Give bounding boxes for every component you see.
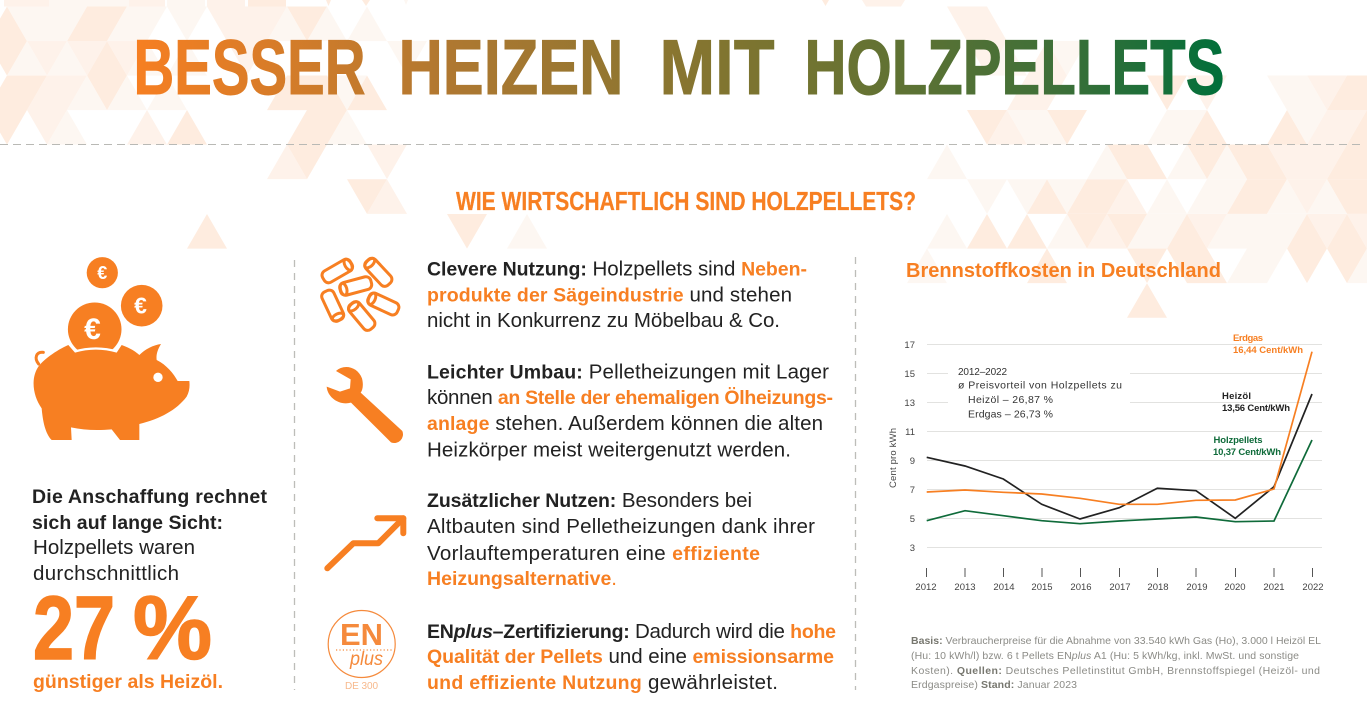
title: MIT bbox=[660, 23, 774, 111]
label: Heizöl: Heizöl bbox=[1222, 391, 1251, 402]
callout: average price advantage: ø Preisvorteil von Holzpellets zu bbox=[958, 380, 1122, 392]
panel: fuel costs bbox=[888, 260, 1324, 691]
y axis labels: 13 bbox=[904, 398, 915, 409]
source note: Kosten). Quellen: Deutsches Pelletinstitut GmbH, Brennstoffspiegel (Heizöl- und bbox=[911, 665, 1320, 677]
line: Heizöl bbox=[927, 394, 1312, 519]
text: additional benefit: Heizungsalternative. bbox=[427, 567, 617, 590]
label: Erdgas: 16,44 Cent/kWh bbox=[1233, 345, 1303, 356]
text: cheaper than oil: günstiger als Heizöl. bbox=[33, 671, 223, 693]
callout: average price advantage: Heizöl – 26,87 % bbox=[968, 394, 1053, 406]
line: Erdgas bbox=[927, 352, 1312, 504]
x axis labels: 2021 bbox=[1263, 582, 1285, 593]
icon: piggy bank with euro coins: € bbox=[134, 292, 147, 318]
y axis title: Cent pro kWh bbox=[888, 428, 899, 488]
title: BESSER bbox=[134, 23, 366, 111]
label: Holzpellets: Holzpellets bbox=[1214, 435, 1262, 446]
x axis labels: 2017 bbox=[1109, 582, 1131, 593]
source note bbox=[911, 635, 1321, 691]
x axis labels: 2019 bbox=[1186, 582, 1208, 593]
text: certification bbox=[427, 620, 836, 694]
text: easy conversion: Leichter Umbau: Pelletheizungen mit Lager bbox=[427, 360, 829, 384]
x axis labels: 2013 bbox=[954, 582, 976, 593]
y axis labels: 11 bbox=[905, 427, 915, 438]
source note: (Hu: 10 kWh/l) bzw. 6 t Pellets ENplus A1 (Hu: 5 kWh/kg, inkl. MwSt. und sonstige bbox=[911, 650, 1299, 662]
source note: Basis: Verbraucherpreise für die Abnahme von 33.540 kWh Gas (Ho), 3.000 l Heizöl EL bbox=[911, 635, 1321, 647]
background triangle pattern bbox=[0, 0, 1367, 318]
label: Heizöl bbox=[1222, 391, 1290, 414]
big number: 27 bbox=[33, 579, 115, 679]
text: clever use: produkte der Sägeindustrie und stehen bbox=[427, 284, 792, 306]
big number: % bbox=[133, 579, 212, 679]
text: payback statement: sich auf lange Sicht: bbox=[32, 512, 223, 534]
x axis labels: 2014 bbox=[993, 582, 1015, 593]
icon: piggy bank with euro coins: € bbox=[97, 263, 107, 283]
icon: ENplus seal: EN bbox=[340, 617, 383, 652]
icon: rising arrow bbox=[327, 518, 403, 568]
title: HOLZPELLETS bbox=[804, 23, 1224, 111]
callout: average price advantage: 2012–2022 bbox=[958, 367, 1007, 378]
text: clever use bbox=[427, 258, 807, 332]
chart heading: Brennstoffkosten in Deutschland bbox=[906, 260, 1221, 282]
label: Holzpellets bbox=[1213, 435, 1281, 458]
icon: wood pellets bbox=[320, 256, 401, 332]
y axis labels: 15 bbox=[904, 369, 915, 380]
divider: left vertical bbox=[294, 260, 296, 690]
panel: benefits bbox=[320, 256, 836, 694]
y axis labels: 3 bbox=[910, 543, 915, 554]
icon: piggy bank with euro coins: € bbox=[84, 313, 101, 346]
text: additional benefit: Altbauten sind Pelletheizungen dank ihrer bbox=[427, 515, 815, 538]
text: additional benefit: Vorlauftemperaturen eine effiziente bbox=[427, 542, 760, 565]
x axis labels: 2016 bbox=[1070, 582, 1092, 593]
label: Erdgas bbox=[1233, 333, 1303, 356]
y axis labels: 7 bbox=[910, 485, 915, 496]
text: clever use: Clevere Nutzung: Holzpellets sind Neben- bbox=[427, 258, 807, 280]
divider: right vertical bbox=[854, 257, 856, 690]
text: easy conversion bbox=[427, 360, 833, 462]
text: additional benefit: Zusätzlicher Nutzen: Besonders bei bbox=[427, 489, 752, 512]
divider: horizontal dashed line bbox=[0, 144, 1360, 146]
icon: piggy bank with euro coins bbox=[34, 257, 190, 440]
title: HEIZEN bbox=[398, 23, 624, 111]
title bbox=[134, 23, 1224, 111]
source note: Erdgaspreise) Stand: Januar 2023 bbox=[911, 679, 1077, 691]
y axis labels: 5 bbox=[910, 514, 915, 525]
text: additional benefit bbox=[427, 489, 815, 590]
x axis labels: 2022 bbox=[1302, 582, 1324, 593]
text: payback statement: durchschnittlich bbox=[33, 562, 179, 585]
text: payback statement: Die Anschaffung rechnet bbox=[32, 486, 268, 508]
text: clever use: nicht in Konkurrenz zu Möbelbau & Co. bbox=[427, 309, 780, 332]
text: payback statement bbox=[32, 486, 268, 585]
label: Heizöl: 13,56 Cent/kWh bbox=[1222, 403, 1290, 414]
icon: wrench bbox=[327, 367, 403, 443]
panel: savings bbox=[32, 257, 268, 693]
x axis labels: 2020 bbox=[1224, 582, 1246, 593]
icon: ENplus seal bbox=[328, 610, 395, 692]
text: easy conversion: können an Stelle der ehemaligen Ölheizungs- bbox=[427, 386, 833, 409]
callout: average price advantage bbox=[948, 363, 1130, 424]
section heading: WIE WIRTSCHAFTLICH SIND HOLZPELLETS? bbox=[456, 188, 916, 216]
y axis labels bbox=[904, 340, 915, 554]
line chart bbox=[888, 333, 1324, 593]
x axis labels bbox=[915, 582, 1324, 593]
text: certification: Qualität der Pellets und eine emissionsarme bbox=[427, 645, 834, 668]
callout: average price advantage: Erdgas – 26,73 % bbox=[968, 408, 1053, 420]
icon: ENplus seal: DE 300 bbox=[345, 681, 378, 692]
y axis labels: 9 bbox=[910, 456, 915, 467]
text: easy conversion: Heizkörper meist weitergenutzt werden. bbox=[427, 438, 791, 462]
icon: ENplus seal: plus bbox=[349, 649, 383, 670]
x axis labels: 2012 bbox=[915, 582, 937, 593]
x axis labels: 2018 bbox=[1147, 582, 1169, 593]
text: payback statement: Holzpellets waren bbox=[33, 536, 195, 559]
x axis ticks bbox=[926, 568, 1312, 577]
label: Erdgas: Erdgas bbox=[1233, 333, 1263, 344]
text: easy conversion: anlage stehen. Außerdem können die alten bbox=[427, 412, 823, 435]
x axis labels: 2015 bbox=[1031, 582, 1053, 593]
y axis labels: 17 bbox=[904, 340, 915, 351]
label: Holzpellets: 10,37 Cent/kWh bbox=[1213, 447, 1281, 458]
text: certification: ENplus–Zertifizierung: Dadurch wird die hohe bbox=[427, 620, 836, 643]
text: certification: und effiziente Nutzung gewährleistet. bbox=[427, 671, 778, 694]
big number bbox=[33, 579, 212, 679]
line: Holzpellets bbox=[927, 440, 1312, 524]
